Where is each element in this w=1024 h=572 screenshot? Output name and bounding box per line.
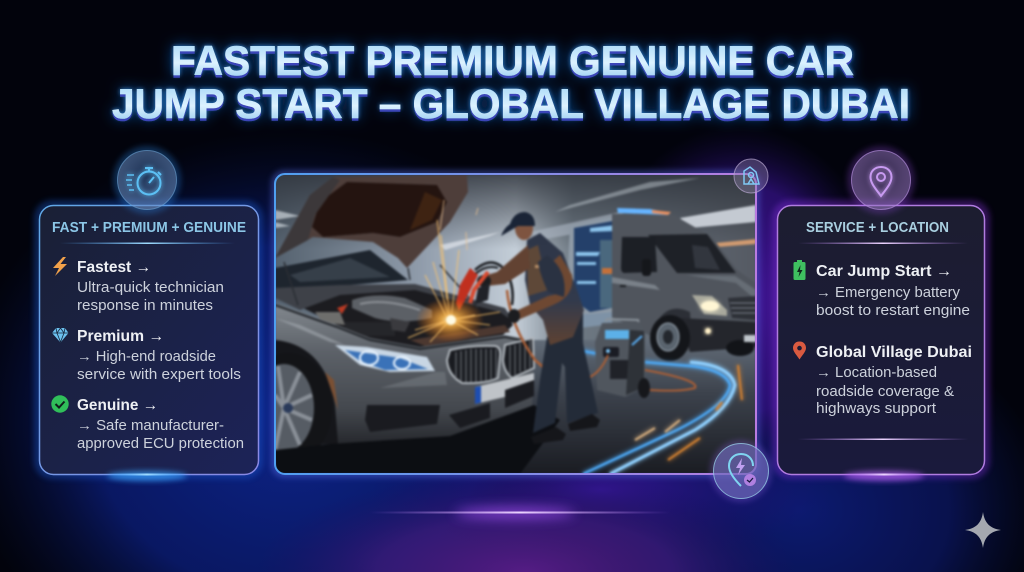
item: genuine	[51, 395, 244, 452]
bottom glow line	[370, 507, 670, 519]
item: global village dubai: Global Village Dubai	[816, 344, 972, 361]
torso	[525, 233, 584, 345]
item: genuine: approved ECU protection	[77, 436, 244, 452]
icon: lightning bolt	[53, 257, 67, 276]
icon: sparkle	[965, 512, 1001, 548]
van rear interior	[568, 220, 614, 328]
icon: charge badge	[710, 440, 772, 502]
icon: check circle	[51, 395, 69, 413]
item: genuine: → Safe manufacturer-	[77, 418, 224, 434]
panel heading: FAST + PREMIUM + GENUINE	[52, 220, 246, 236]
title	[112, 37, 910, 127]
item: global village dubai	[793, 342, 972, 417]
backdrop	[275, 174, 756, 354]
van	[566, 208, 756, 361]
legs	[533, 312, 598, 433]
technician	[477, 212, 600, 444]
item: fastest: Fastest →	[77, 259, 151, 276]
jump cables	[462, 262, 695, 391]
light trail	[577, 350, 735, 474]
item: car jump start: → Emergency battery	[816, 285, 961, 301]
item: genuine: Genuine →	[77, 397, 158, 414]
item: premium: → High-end roadside	[77, 349, 216, 365]
item: car jump start: boost to restart engine	[816, 303, 970, 319]
item: car jump start	[794, 260, 970, 319]
item: global village dubai: highways support	[816, 401, 936, 417]
photo: technician jump starting a car	[244, 170, 760, 478]
windshield of car	[276, 248, 408, 289]
floor	[275, 340, 756, 474]
item: premium: service with expert tools	[77, 367, 241, 383]
icon: stopwatch badge	[113, 146, 181, 214]
icon: location pin badge	[847, 146, 915, 214]
item: fastest: response in minutes	[77, 298, 213, 314]
item: premium	[52, 328, 241, 383]
car headlight	[335, 345, 435, 372]
icon: tools badge	[734, 159, 768, 193]
power unit	[595, 319, 650, 398]
kidney grille	[447, 338, 534, 383]
photo frame	[275, 174, 756, 474]
arms	[484, 245, 530, 286]
car hood	[275, 175, 478, 308]
item: fastest: Ultra-quick technician	[77, 280, 224, 296]
item: premium: Premium →	[77, 328, 164, 345]
item: fastest	[53, 257, 224, 314]
head and cap	[514, 224, 534, 242]
panel: service + location	[772, 200, 990, 481]
icon: diamond	[52, 328, 68, 342]
item: car jump start: Car Jump Start →	[816, 263, 952, 280]
title: FASTEST PREMIUM GENUINE CAR	[171, 37, 854, 84]
item: global village dubai: roadside coverage &	[816, 384, 954, 400]
licence plate	[475, 373, 534, 404]
icon: battery	[794, 260, 806, 280]
car body	[276, 304, 536, 460]
engine bay	[275, 284, 515, 347]
jump clamps	[456, 268, 478, 311]
icon: red map pin	[793, 342, 806, 360]
sparks	[408, 200, 500, 342]
wheel	[276, 339, 338, 460]
panel heading: SERVICE + LOCATION	[806, 220, 949, 236]
panel: fast + premium + genuine	[34, 200, 263, 481]
item: global village dubai: → Location-based	[816, 365, 937, 381]
car shadow	[275, 405, 560, 474]
title: JUMP START – GLOBAL VILLAGE DUBAI	[112, 80, 910, 127]
